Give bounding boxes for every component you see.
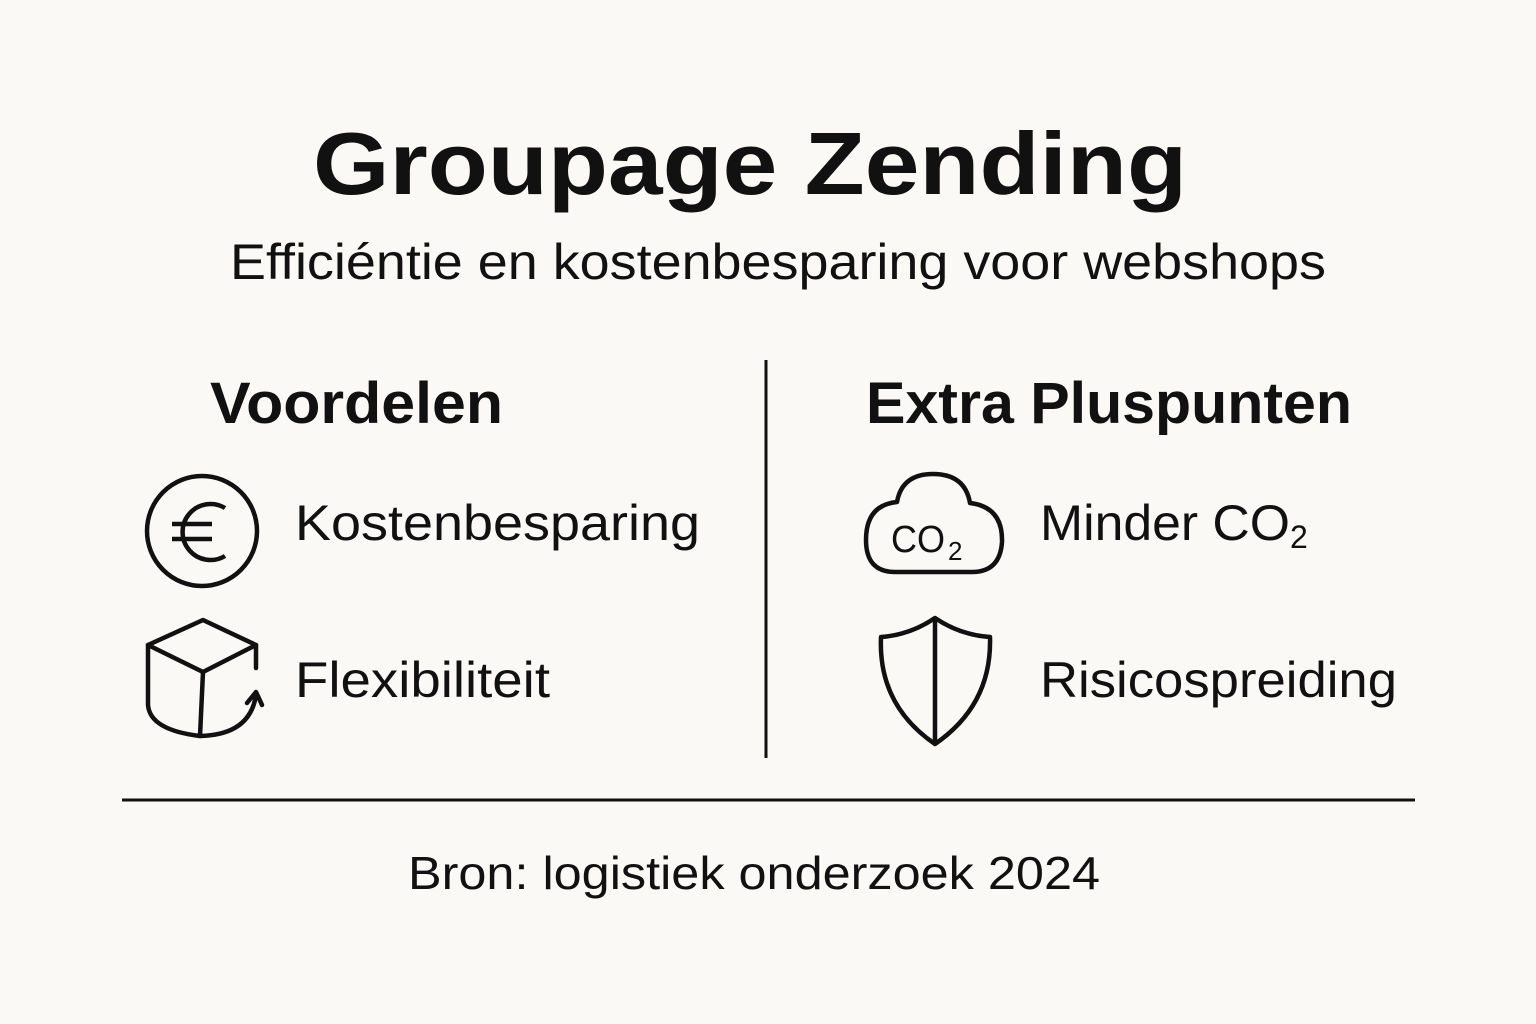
icon: euro coin <box>147 476 257 586</box>
icon: CO2 cloud <box>866 474 1002 572</box>
item: Risicospreiding: Risicospreiding <box>1040 652 1397 708</box>
item: Minder CO2: Minder CO <box>1040 495 1290 551</box>
item: Kostenbesparing: Kostenbesparing <box>295 495 700 551</box>
item: Flexibiliteit: Flexibiliteit <box>295 652 550 708</box>
icon: CO2 cloud: 2 <box>948 536 962 566</box>
heading: Voordelen: Voordelen <box>210 371 503 436</box>
subtitle: Efficiéntie en kostenbesparing voor webshops <box>230 234 1326 290</box>
title: Groupage Zending <box>313 114 1187 213</box>
icon: shield <box>881 618 990 744</box>
icon: box with arrow <box>148 620 262 736</box>
item: Minder CO2: 2 <box>1290 519 1308 555</box>
heading: Extra Pluspunten: Extra Pluspunten <box>866 371 1352 436</box>
footer source: Bron: logistiek onderzoek 2024 <box>408 847 1100 899</box>
icon: CO2 cloud: CO <box>891 519 945 561</box>
